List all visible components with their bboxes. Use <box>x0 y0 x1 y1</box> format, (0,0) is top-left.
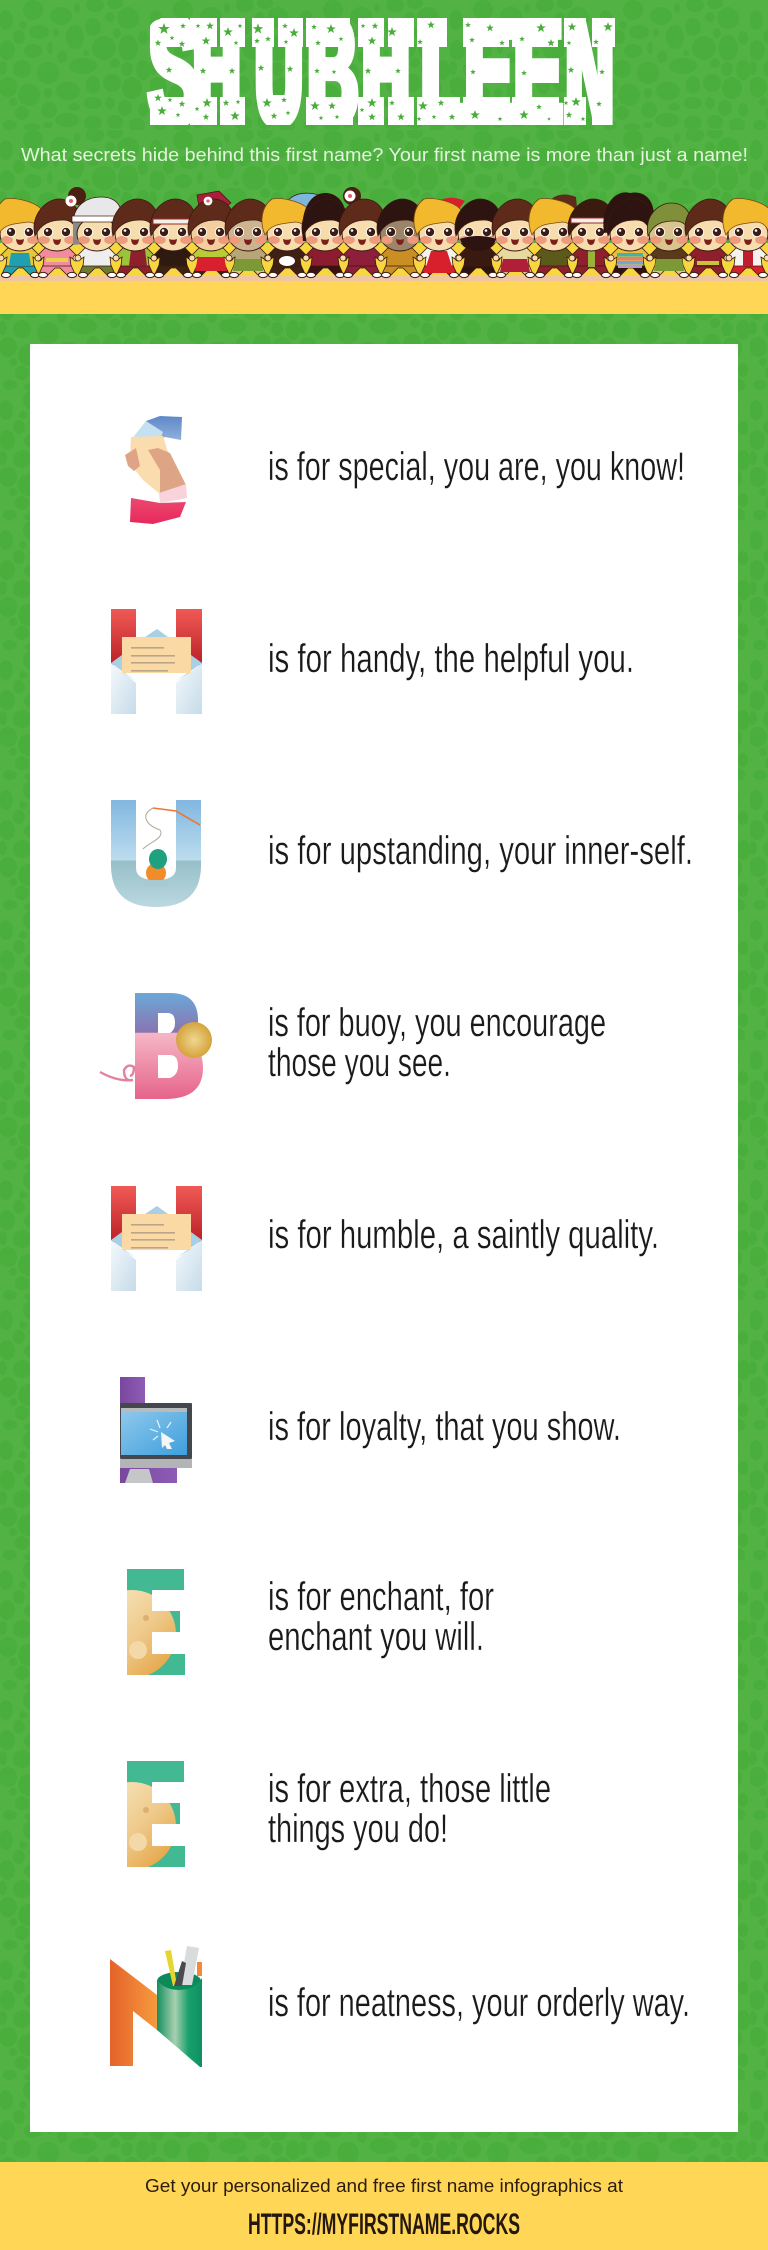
kid 11: dark skin ochre robe <box>377 199 424 278</box>
kid 17: spiky black hair striped top <box>603 192 654 278</box>
icon: letter N with pencil cup <box>110 1946 202 2067</box>
icon: letter H with envelope <box>111 609 202 714</box>
banner: row of cartoon kids <box>0 187 768 278</box>
icon: letter L with monitor <box>120 1377 192 1483</box>
text: second E lines: things you do! <box>268 1807 448 1851</box>
text: second E lines <box>268 1767 551 1851</box>
kid 3: white keffiyeh <box>72 197 123 278</box>
text: E lines <box>268 1575 494 1659</box>
kid 14: brown hair polka skirt <box>492 199 539 278</box>
kid 19: maroon robe yellow belt <box>685 199 732 278</box>
kid 6: red hat and skirt <box>188 191 235 278</box>
icon: second letter E with cookie <box>88 1761 185 1870</box>
text: B lines <box>268 1001 606 1085</box>
kid 5: headband and dark outfit <box>150 199 197 278</box>
kid 4: green and maroon outfit <box>112 199 159 278</box>
text: H line: is for handy, the helpful you. <box>268 637 634 681</box>
kid 13: black hair and beard <box>455 199 502 278</box>
text: B lines: is for buoy, you encourage <box>268 1001 606 1045</box>
kid 12: blonde red dress <box>414 198 465 278</box>
kid 2: pink kimono <box>34 187 86 278</box>
kid 16: white headband green sash <box>568 199 615 278</box>
icon: letter U with fisher <box>111 800 201 907</box>
kid 18: green leaf headdress <box>647 203 691 278</box>
kid 1: blonde overalls <box>0 199 44 278</box>
footer band <box>0 2162 768 2250</box>
text: second E lines: is for extra, those little <box>268 1767 551 1811</box>
text: E lines: is for enchant, for <box>268 1575 494 1619</box>
icon: letter S with hands <box>125 416 187 524</box>
kid 10: flower bun maroon dress <box>339 187 386 278</box>
kid 7: tan skin grass skirt <box>225 199 272 278</box>
banner: yellow ground strip <box>0 243 768 314</box>
text: E lines: enchant you will. <box>268 1615 484 1659</box>
text: B lines: those you see. <box>268 1041 451 1085</box>
icon: letter B with pig and coin <box>100 993 212 1099</box>
footer url: HTTPS://MYFIRSTNAME.ROCKS <box>248 2208 520 2241</box>
text: L line: is for loyalty, that you show. <box>268 1405 621 1449</box>
icon: second letter H with envelope <box>111 1186 202 1291</box>
kid 20: blonde white and red outfit <box>723 199 768 278</box>
kid 9: tall black hair <box>302 193 349 278</box>
title <box>146 18 615 125</box>
kid 8: blonde with blue cap <box>262 193 319 278</box>
kid 15: blonde spiky hair olive top <box>529 195 578 278</box>
footer text: Get your personalized and free first name infographics at <box>145 2175 623 2196</box>
subtitle: What secrets hide behind this first name? Your first name is more than just a name! <box>21 144 748 165</box>
panel: white card <box>30 344 738 2132</box>
icon: letter E with cookie <box>88 1569 185 1678</box>
